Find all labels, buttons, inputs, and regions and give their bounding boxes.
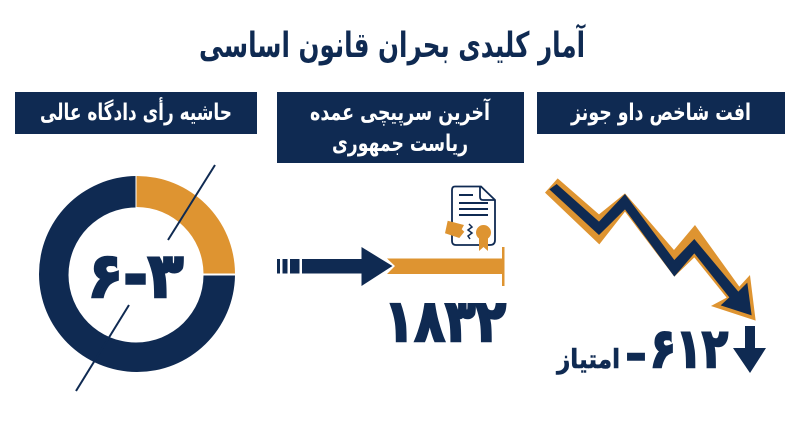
- diagonal slash lower: [76, 305, 129, 391]
- icon: torn document with seal: [445, 186, 495, 251]
- number: 1832: ۱۸۳۲: [384, 287, 506, 355]
- donut chart: [39, 176, 235, 372]
- heading: supreme court margin: حاشیه رأی دادگاه عالی: [40, 96, 232, 126]
- icon: down arrow: [733, 326, 766, 373]
- number: -612 points: امتیاز: [555, 345, 620, 375]
- title: آمار کلیدی بحران قانون اساسی: [199, 23, 586, 66]
- icon: falling zigzag arrow: [545, 178, 756, 321]
- heading: last presidential defiance: [277, 92, 524, 163]
- diagonal slash upper: [168, 165, 215, 240]
- heading: last presidential defiance: آخرین سرپیچی عمده: [310, 97, 491, 126]
- number: -612 points: [555, 317, 728, 380]
- heading: dow jones drop: [537, 92, 785, 134]
- panel: dow jones drop: [537, 92, 785, 380]
- number: 6-3: ۶-۳: [88, 239, 184, 312]
- number: -612 points: -: [626, 333, 646, 377]
- panel: last presidential defiance: [277, 92, 524, 355]
- panel: supreme court margin: [15, 92, 257, 391]
- number: -612 points: ۶۱۲: [650, 317, 728, 380]
- heading: last presidential defiance: ریاست جمهوری: [332, 131, 468, 157]
- timeline arrow: [277, 247, 504, 286]
- heading: supreme court margin: [15, 92, 257, 134]
